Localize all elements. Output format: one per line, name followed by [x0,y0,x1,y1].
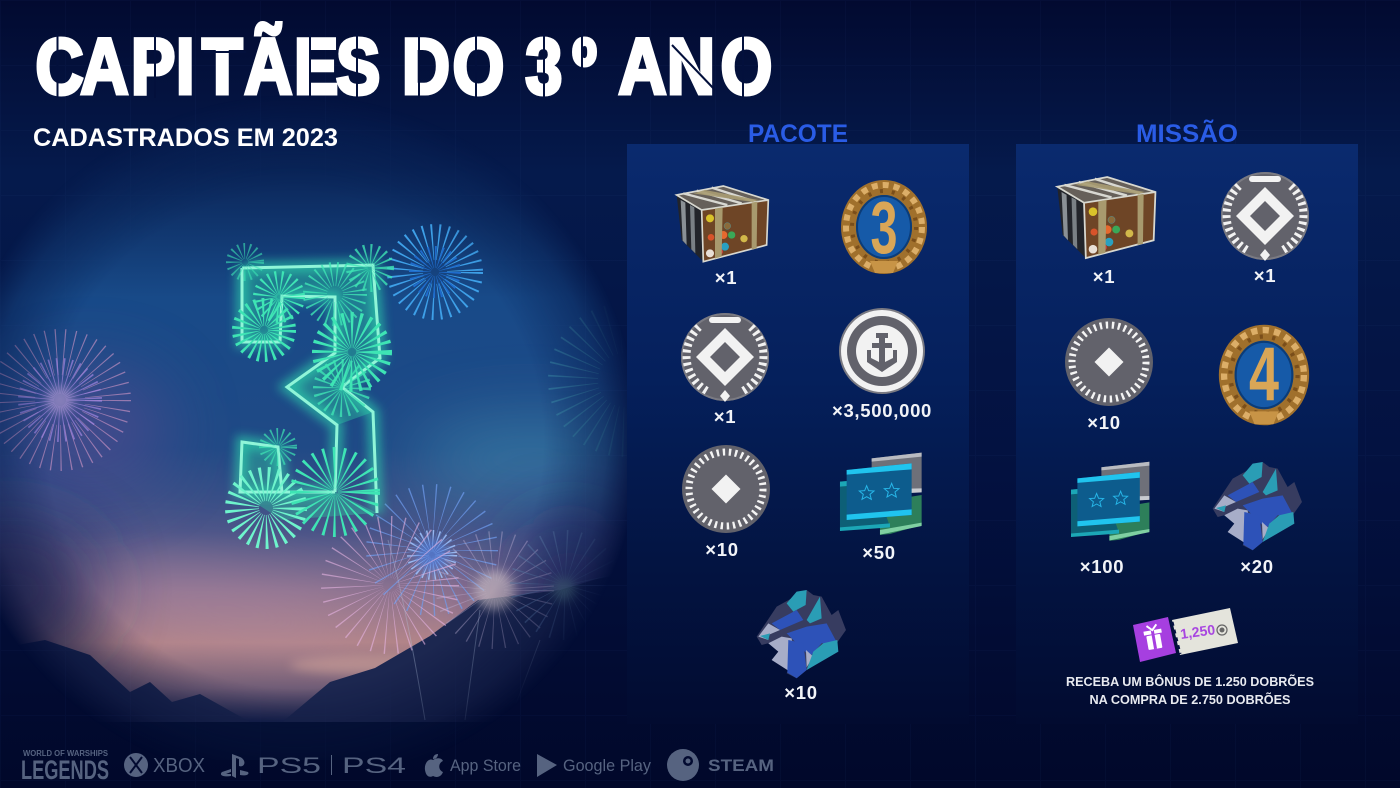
icon: bonus ticket: 1,250 [1179,621,1216,642]
bonus caption: NA COMPRA DE 2.750 DOBRÕES [1090,692,1290,707]
item: diamond badge [681,313,769,427]
item: diamond badge [1221,172,1309,286]
logo: app store [425,754,521,777]
item: wolf camouflage: ×20 [1240,556,1274,577]
item: crate: ×1 [715,267,737,288]
item: wolf camouflage [757,590,846,703]
item: coin [682,445,770,560]
item: coin [1065,318,1153,433]
icon: gift [1143,624,1164,650]
sparkler bursts on the 3 [234,251,383,532]
logo: steam: STEAM [708,756,774,775]
logo: world of warships legends [21,749,109,785]
item: credits [832,308,932,421]
bonus caption [1066,674,1314,707]
item: coin: ×10 [705,539,739,560]
heading: pacote: PACOTE [748,120,848,148]
fireworks: low burst cluster [352,514,595,720]
bonus caption: RECEBA UM BÔNUS DE 1.250 DOBRÕES [1066,674,1314,689]
firework: blue top right [405,242,465,302]
item: wolf camouflage: ×10 [784,682,818,703]
panel: pacote [627,120,969,724]
firework: teal right [573,328,677,432]
logo: playstation [221,753,406,778]
heading: missao: MISSÃO [1136,118,1238,148]
subtitle: CADASTRADOS EM 2023 [33,124,338,152]
fireworks scene [0,144,627,722]
logo: google play: Google Play [563,757,652,775]
icon: medal 4: 4 [1249,332,1279,417]
item: coin: ×10 [1087,412,1121,433]
item: flags: ×100 [1080,556,1124,577]
item: flags: ×50 [862,542,896,563]
logo: playstation: PS5 [257,753,321,778]
item: flags [840,453,922,563]
icon: medal 3: 3 [870,186,898,269]
logo: xbox [124,753,205,777]
glowing number 3 [240,265,380,520]
item: credits: ×3,500,000 [832,400,932,421]
logo: xbox: XBOX [153,755,205,777]
icon: medal 4 [1224,330,1304,424]
icon: bonus ticket [1133,608,1238,662]
footer platform logos [21,749,774,785]
logo: world of warships legends: WORLD OF WARSHIPS [23,749,109,758]
logo: playstation: PS4 [342,753,406,778]
item: flags [1071,462,1149,577]
title: CAPITÃES DO 3º ANO [36,23,772,111]
mountains [25,580,597,740]
logo: google play [537,754,652,777]
panel: missao [1016,118,1358,724]
item: wolf camouflage [1213,462,1302,577]
logo: world of warships legends: LEGENDS [21,755,109,785]
item: crate: ×1 [1093,266,1115,287]
item: crate [677,186,768,288]
logo: steam [667,749,774,781]
item: crate [1057,177,1155,287]
item: diamond badge: ×1 [1254,265,1276,286]
icon: medal 3 [846,185,922,273]
clouds and glows [0,370,650,675]
item: diamond badge: ×1 [714,406,736,427]
logo: app store: App Store [450,757,521,775]
firework: purple left [12,352,108,448]
